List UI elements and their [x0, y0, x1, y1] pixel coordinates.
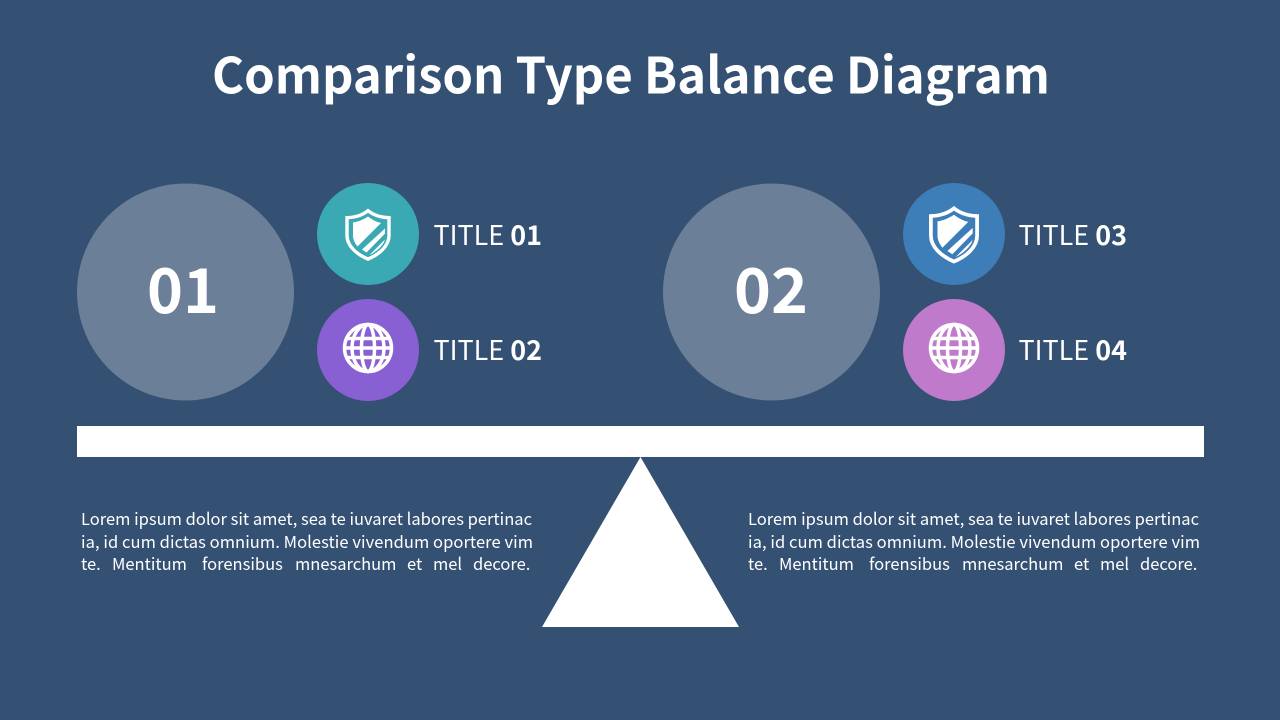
label: title 01: TITLE 01 — [434, 214, 542, 253]
text block: right: decore. — [1140, 551, 1197, 575]
text block: right: te. — [748, 551, 768, 575]
text block: right: et — [1074, 551, 1089, 575]
text block: right: Lorem ipsum dolor sit amet, sea te iuvaret labores pertinac — [748, 506, 1199, 530]
text block: left: Mentitum — [112, 551, 187, 575]
balance beam — [77, 426, 1204, 457]
text block: right: ia, id cum dictas omnium. Molestie vivendum oportere vim — [748, 529, 1200, 553]
text block: left — [81, 506, 533, 575]
large circle 01: 01 — [147, 241, 219, 331]
icon: shield teal — [317, 183, 419, 285]
large circle 01 — [77, 184, 294, 400]
label: title 04: TITLE 04 — [1018, 329, 1127, 368]
text block: left: forensibus — [202, 551, 283, 575]
title: Comparison Type Balance Diagram — [212, 36, 1050, 108]
text block: left: Lorem ipsum dolor sit amet, sea te iuvaret labores pertinac — [81, 506, 532, 530]
text block: right — [748, 506, 1200, 575]
text block: right: mnesarchum — [962, 551, 1063, 575]
balance fulcrum — [542, 457, 739, 627]
panel: right group — [663, 183, 1127, 401]
text block: left: et — [407, 551, 422, 575]
large circle 02 — [663, 184, 880, 400]
text block: left: te. — [81, 551, 101, 575]
panel: left group — [77, 183, 542, 401]
text block: right: mel — [1100, 551, 1129, 575]
label: title 02: TITLE 02 — [434, 329, 542, 368]
icon: globe purple — [317, 299, 419, 401]
text block: right: Mentitum — [779, 551, 854, 575]
icon: shield blue — [903, 183, 1005, 285]
text block: left: mel — [433, 551, 462, 575]
text block: left: ia, id cum dictas omnium. Molestie vivendum oportere vim — [81, 529, 533, 553]
text block: left: mnesarchum — [295, 551, 396, 575]
label: title 03: TITLE 03 — [1018, 214, 1127, 253]
text block: left: decore. — [473, 551, 530, 575]
large circle 02: 02 — [734, 241, 808, 331]
icon: globe pink — [903, 299, 1005, 401]
text block: right: forensibus — [869, 551, 950, 575]
